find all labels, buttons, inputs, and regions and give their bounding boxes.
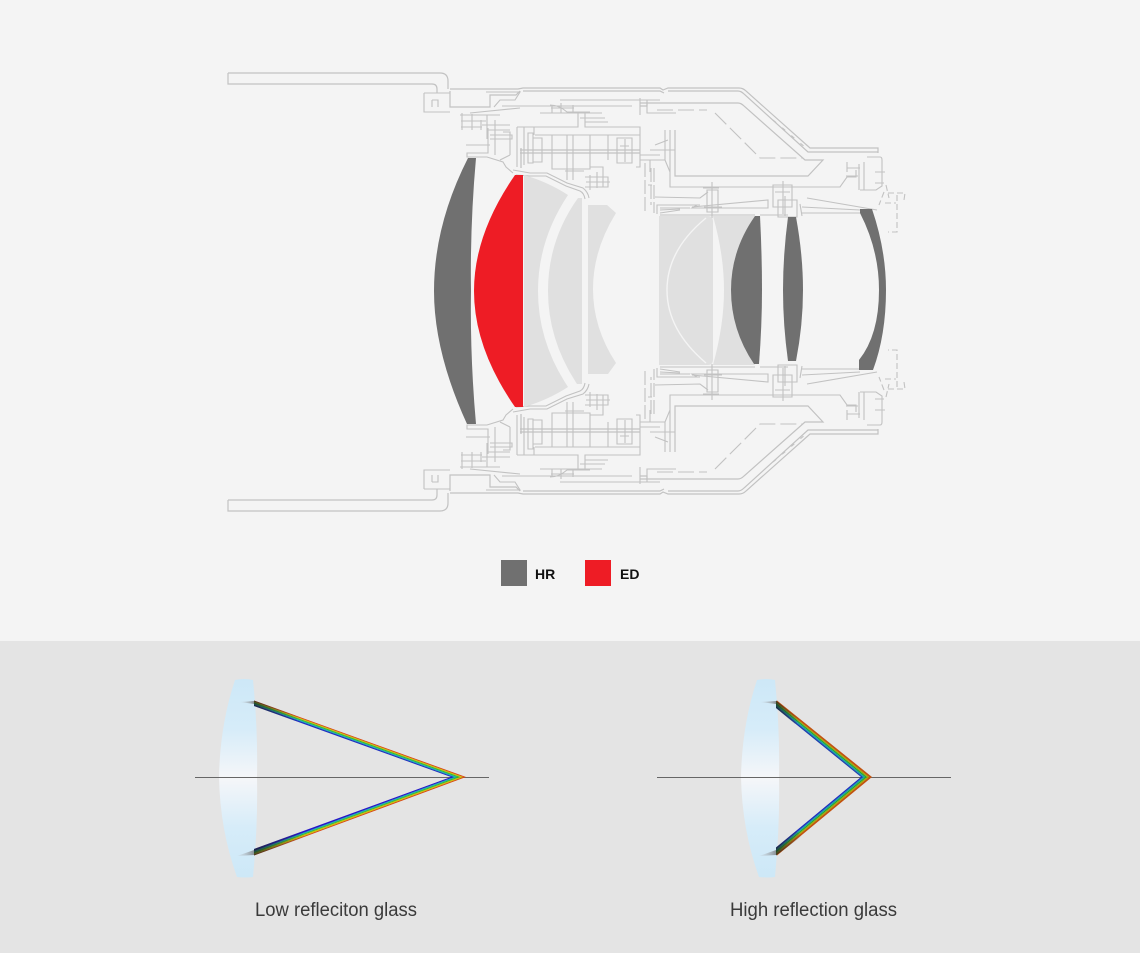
- lens shape: [219, 679, 257, 878]
- line art: lens barrel lower and upper mechanics: [228, 73, 905, 511]
- lens: rear group light doublet: [659, 216, 755, 365]
- lens edge highlights: [759, 701, 776, 856]
- lens: light element 2: [548, 198, 582, 384]
- lens shape: [741, 679, 779, 878]
- diagram: low reflection glass: [195, 679, 489, 921]
- lens: light element 1: [524, 175, 568, 407]
- legend: HR label: HR: [535, 566, 555, 582]
- rainbow rays upper: [776, 700, 872, 777]
- rainbow rays upper: [254, 700, 466, 777]
- caption: low reflection: Low refleciton glass: [255, 900, 417, 921]
- legend: HR swatch: [501, 560, 527, 586]
- legend: [501, 560, 639, 586]
- panel: glass comparison: [0, 641, 1140, 953]
- lens: light element 3: [588, 205, 616, 374]
- lens: rear HR element 1: [731, 216, 762, 364]
- diagram: high reflection glass: [657, 679, 951, 921]
- lens: ED element: [474, 175, 523, 407]
- lens: rear HR element 3: [859, 209, 886, 370]
- rainbow rays lower: [254, 777, 466, 856]
- lens: rear HR element 2: [783, 217, 803, 361]
- lens: front HR element: [434, 158, 476, 424]
- legend: ED swatch: [585, 560, 611, 586]
- legend: ED label: ED: [620, 566, 639, 582]
- panel: lens cross-section: [0, 0, 1140, 641]
- optical axis: [657, 776, 951, 778]
- rainbow rays lower: [776, 777, 872, 856]
- lens edge highlights: [237, 701, 254, 856]
- caption: high reflection: High reflection glass: [730, 900, 897, 921]
- optical axis: [195, 776, 489, 778]
